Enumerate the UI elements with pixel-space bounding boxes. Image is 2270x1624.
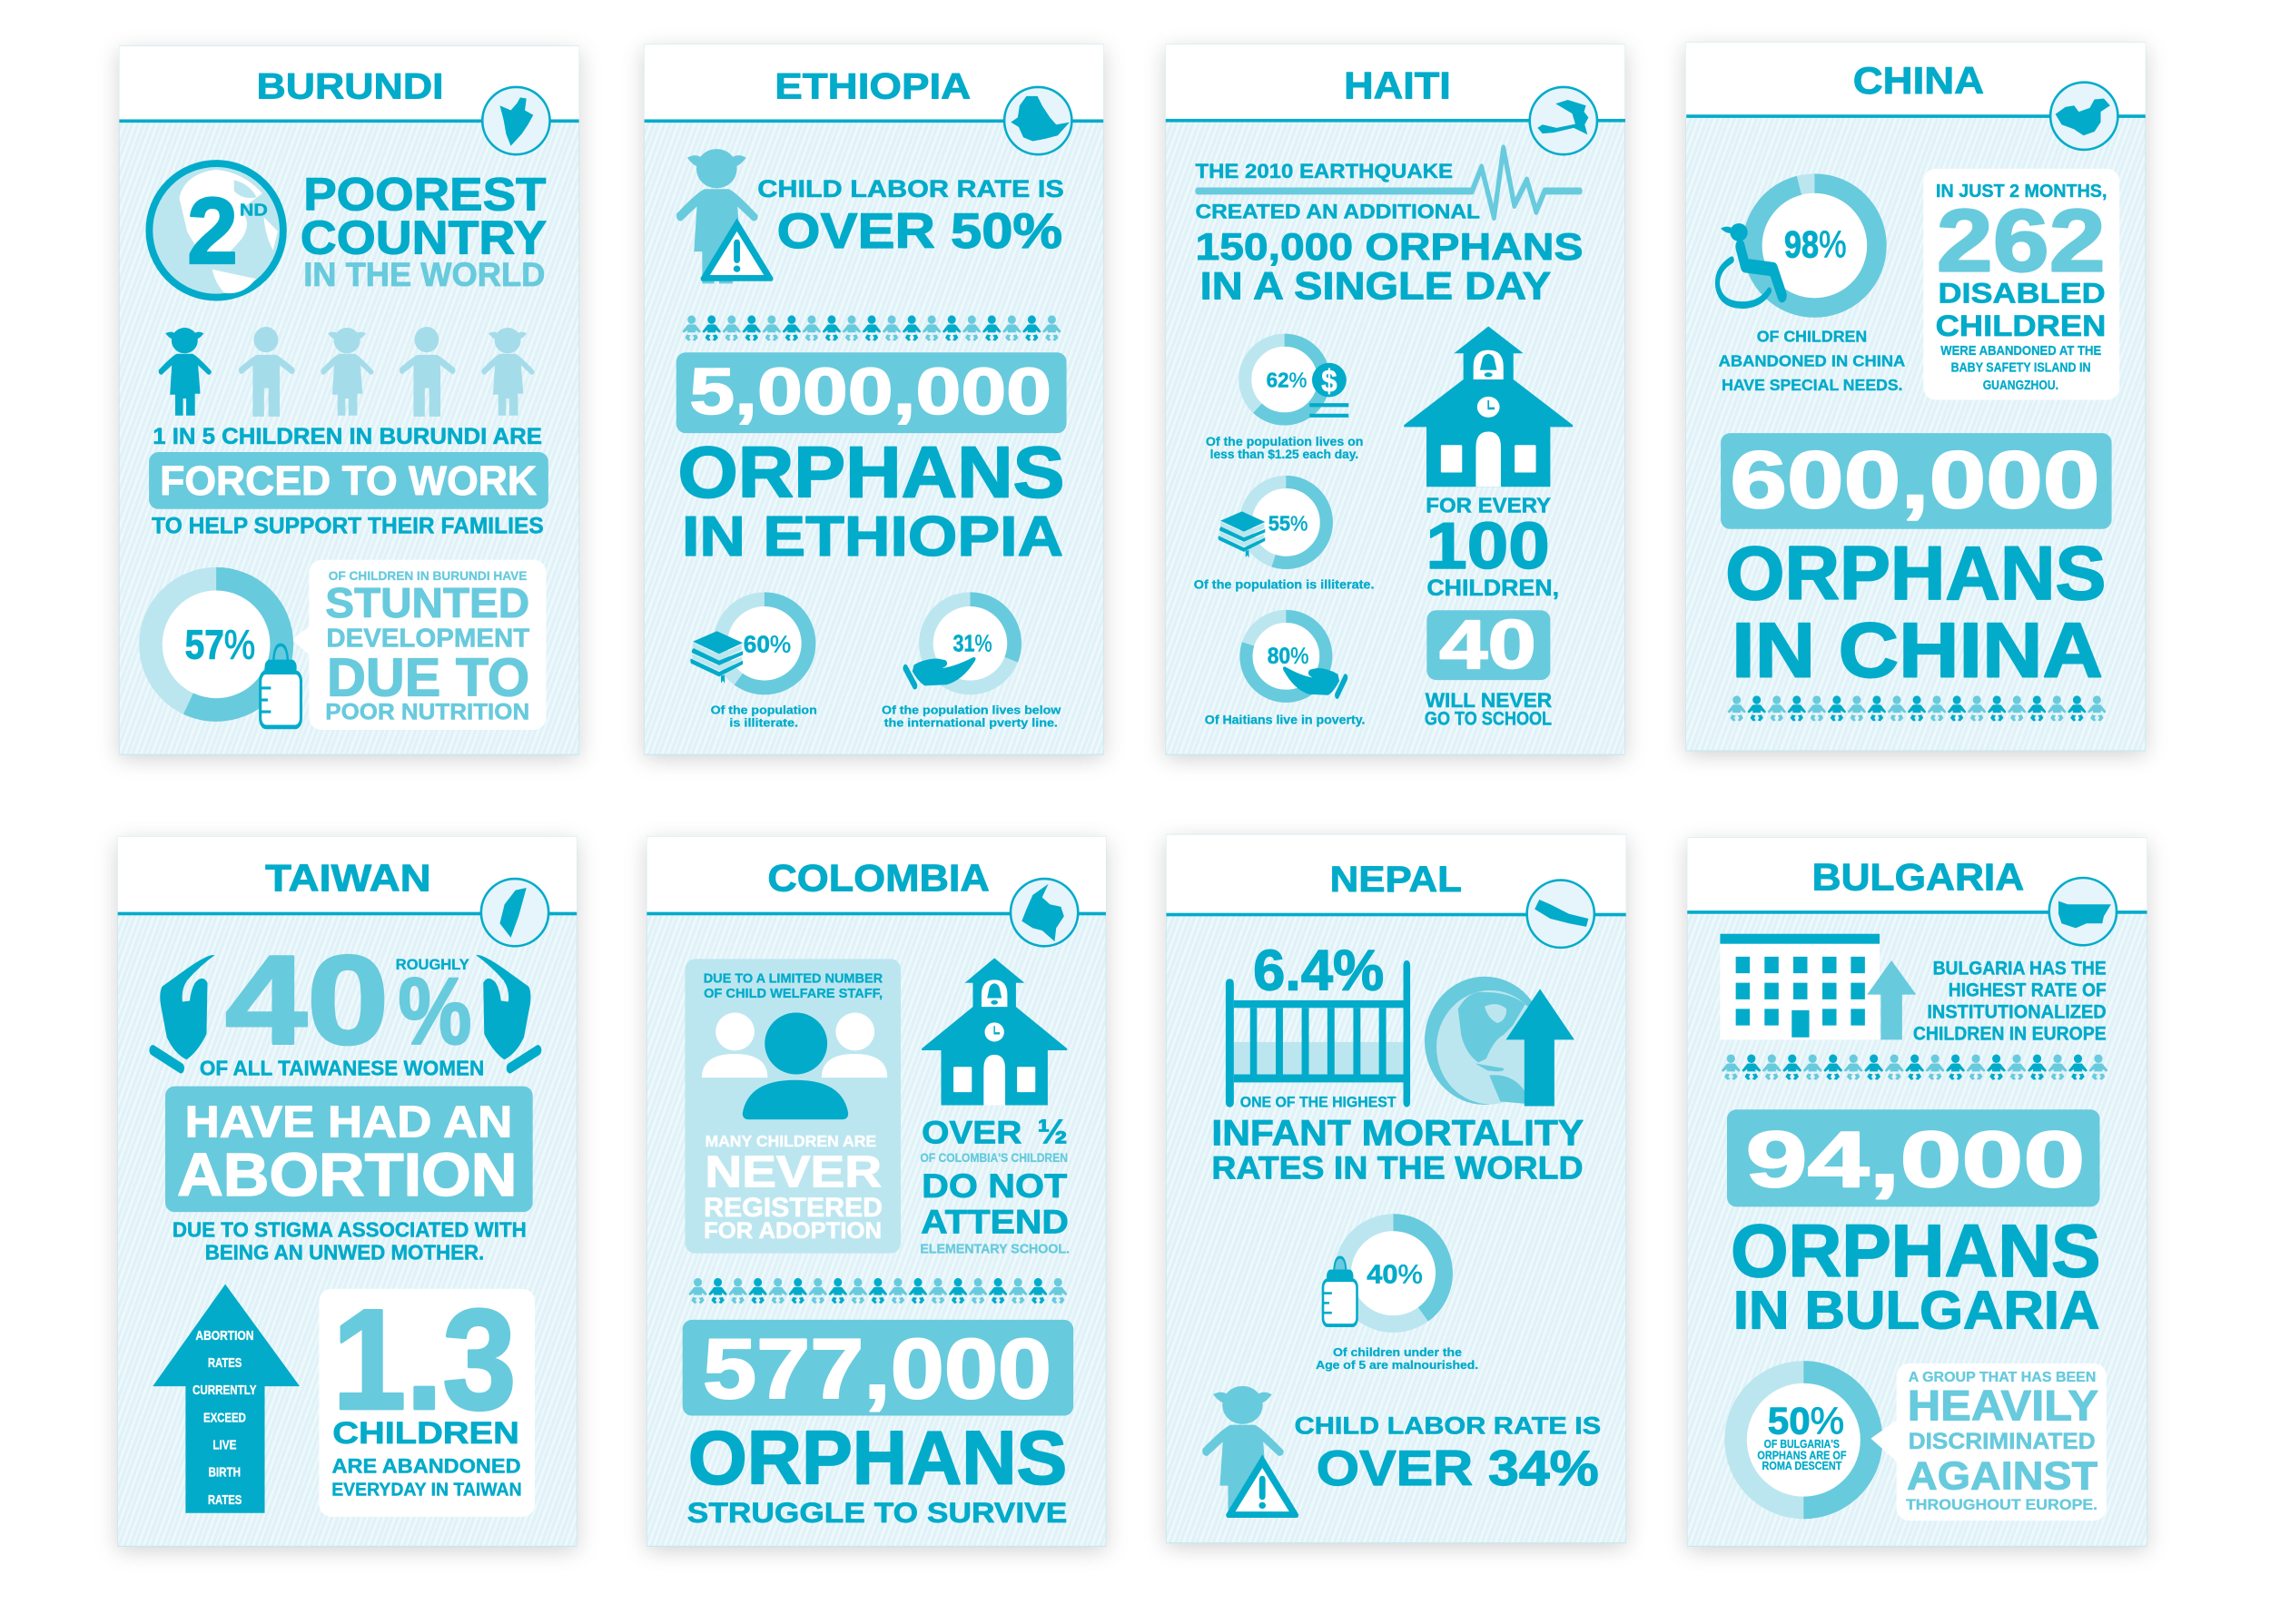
text: for every 100 children (1426, 494, 1559, 601)
callout: stunted development: POOR NUTRITION (325, 699, 529, 724)
panel: Colombia (646, 837, 1106, 1551)
callout: stunted development: DEVELOPMENT (326, 625, 530, 654)
chart: donut 98%: 98% (1784, 223, 1847, 266)
icon: open hand (1283, 666, 1346, 695)
callout: heavily discriminated against: HEAVILY (1908, 1383, 2098, 1430)
text: orphans in China: ORPHANS (1725, 532, 2106, 616)
icon: child in wheelchair (1718, 223, 1782, 305)
icon: books (690, 631, 743, 684)
text: orphans in Bulgaria: ORPHANS (1731, 1208, 2101, 1292)
text: child labor rate over 50%: CHILD LABOR RATE IS (757, 176, 1064, 202)
icon: baby bottle (261, 645, 301, 727)
panel: Burundi (119, 46, 579, 759)
chart: donut 55% (1246, 482, 1327, 563)
heading: Ethiopia: ETHIOPIA (775, 66, 971, 107)
chart: donut 98% (1752, 183, 1877, 308)
text: to help support their families: TO HELP SUPPORT THEIR FAMILIES (152, 513, 544, 538)
chart: donut 62%: 62% (1267, 369, 1307, 392)
icon: row of babies (683, 315, 1061, 341)
chart: donut 80% (1246, 616, 1326, 696)
panel: never registered for adoption: NEVER (705, 1147, 882, 1196)
callout: 5,000,000 (676, 352, 1067, 433)
callout: 600,000: 600,000 (1730, 435, 2100, 525)
panel: never registered for adoption: OF CHILD WELFARE STAFF, (704, 985, 883, 1000)
arrow: abortion rates exceed live birth rates: CURRENTLY (192, 1383, 257, 1398)
callout: 262 disabled children (1923, 169, 2119, 400)
chart: donut 50%: ROMA DESCENT (1762, 1461, 1842, 1473)
callout: 262 disabled children: DISABLED (1938, 277, 2106, 309)
heading: Colombia: COLOMBIA (767, 857, 990, 900)
text: orphans struggle to survive: ORPHANS (688, 1416, 1067, 1501)
text: orphans in Ethiopia: ORPHANS (677, 433, 1065, 513)
text: roughly 40%: % (399, 959, 471, 1064)
text: highest rate of institutionalized children: BULGARIA HAS THE (1933, 958, 2107, 979)
callout: 262 disabled children: WERE ABANDONED AT THE (1940, 342, 2102, 358)
text: highest rate of institutionalized children: HIGHEST RATE OF (1949, 979, 2107, 1000)
text: the 2010 earthquake: THE 2010 EARTHQUAKE (1195, 160, 1453, 182)
text: highest rate of institutionalized children (1913, 958, 2107, 1044)
text: infant mortality rates (1211, 1114, 1584, 1186)
panel: never registered for adoption: DUE TO A LIMITED NUMBER (704, 969, 883, 986)
icon: school house (1404, 326, 1573, 487)
icon: row of babies (1722, 1055, 2107, 1080)
arrow: up (1867, 960, 1916, 1039)
callout: heavily discriminated against: A GROUP THAT HAS BEEN (1909, 1369, 2096, 1384)
text: orphans in Bulgaria (1731, 1208, 2101, 1340)
icon: row of babies (689, 1278, 1067, 1304)
text: roughly 40%: ROUGHLY (396, 957, 469, 974)
chart: donut 60%: 60% (744, 631, 791, 658)
text: 6.4%: 6.4% (1253, 940, 1384, 1003)
text: 150,000 orphans in a single day: IN A SINGLE DAY (1200, 265, 1551, 308)
text: over half do not attend: DO NOT (922, 1167, 1067, 1205)
text: over half do not attend: ½ (1038, 1112, 1068, 1151)
text: illiterate caption: Of the population is illiterate. (1194, 579, 1374, 592)
icon: right hand (476, 955, 538, 1068)
chart: donut 50%: 50% (1768, 1400, 1844, 1442)
chart: donut 31%: 31% (953, 630, 992, 657)
text: illiteracy caption: is illiterate. (729, 717, 798, 730)
icon: seismograph line (1198, 148, 1580, 217)
icon: Taiwan map badge (481, 879, 548, 946)
icon: globe with 2nd rank (149, 163, 283, 298)
arrow: abortion rates exceed live birth rates: RATES (208, 1492, 242, 1507)
text: 150,000 orphans in a single day (1195, 202, 1584, 308)
chart: donut 50%: ORPHANS ARE OF (1757, 1450, 1847, 1462)
callout: 1.3 children abandoned: 1.3 (332, 1281, 516, 1440)
heading: Nepal: NEPAL (1330, 860, 1462, 901)
callout: forced to work: FORCED TO WORK (160, 458, 537, 505)
callout: 40 (1426, 605, 1550, 684)
callout: 1.3 children abandoned: EVERYDAY IN TAIWAN (331, 1480, 522, 1500)
panel: Bulgaria (1687, 838, 2147, 1551)
text: orphans in China (1725, 532, 2106, 694)
text: child labor rate over 50% (757, 176, 1064, 259)
text: for every 100 children: FOR EVERY (1426, 494, 1551, 517)
text: child labor rate over 50%: OVER 50% (777, 203, 1062, 259)
icon: open hand (905, 657, 976, 685)
callout: 1.3 children abandoned (319, 1281, 535, 1517)
text: 150,000 orphans in a single day: 150,000 ORPHANS (1195, 225, 1584, 269)
chart: donut 50% (1736, 1372, 1871, 1508)
text: 150,000 orphans in a single day: CREATED AN ADDITIONAL (1195, 202, 1480, 224)
panel: never registered for adoption (685, 959, 901, 1254)
chart: donut 62% (1245, 340, 1324, 418)
callout: heavily discriminated against: DISCRIMINATED (1909, 1430, 2096, 1454)
text: special needs caption: HAVE SPECIAL NEEDS. (1722, 377, 1903, 395)
chart: donut 31% (926, 599, 1014, 687)
callout: 40: 40 (1439, 605, 1536, 684)
text: poorest country in the world: COUNTRY (301, 212, 547, 264)
text: orphans in Bulgaria: IN BULGARIA (1733, 1280, 2100, 1340)
text: malnourished caption: Age of 5 are malnourished. (1316, 1360, 1478, 1373)
heading: China: CHINA (1853, 59, 1984, 103)
chart: donut 60% (720, 599, 809, 687)
panel: never registered for adoption: MANY CHILDREN ARE (705, 1133, 876, 1151)
text: poverty caption: Of Haitians live in poverty. (1205, 714, 1365, 727)
text: poverty caption: Of the population lives below (882, 704, 1061, 717)
panel: Taiwan (118, 837, 577, 1551)
callout: 94,000 (1727, 1109, 2100, 1206)
icon: girl with warning sign (1202, 1386, 1298, 1518)
chart: donut 80%: 80% (1268, 643, 1309, 669)
text: poverty caption (882, 704, 1061, 730)
text: special needs caption: ABANDONED IN CHINA (1719, 352, 1905, 370)
icon: books (1219, 511, 1265, 557)
arrow: abortion rates exceed live birth rates: RATES (208, 1355, 242, 1371)
text: infant mortality rates: RATES IN THE WORLD (1211, 1151, 1584, 1186)
chart: donut 57% (151, 579, 281, 710)
icon: left hand (153, 955, 214, 1068)
text: $1.25 caption (1206, 437, 1363, 461)
text: infant mortality rates: INFANT MORTALITY (1211, 1114, 1584, 1154)
icon: Ethiopia map badge (1004, 87, 1071, 154)
text: poorest country in the world (301, 169, 547, 293)
text: over half do not attend: ATTEND (921, 1204, 1069, 1241)
text: roughly 40% (200, 929, 484, 1080)
callout: forced to work (149, 452, 548, 509)
text: orphans in Ethiopia (677, 433, 1065, 568)
text: poverty caption: the international pverty line. (884, 717, 1058, 730)
icon: girl with warning sign (676, 149, 774, 283)
icon: institution building (1720, 934, 1880, 1039)
panel: China (1686, 43, 2146, 755)
text: roughly 40%: 40 (225, 929, 389, 1070)
chart: donut 40% (1343, 1223, 1444, 1324)
panel: never registered for adoption: FOR ADOPTION (704, 1217, 882, 1244)
heading: Bulgaria: BULGARIA (1812, 856, 2024, 899)
text: roughly 40%: OF ALL TAIWANESE WOMEN (200, 1057, 484, 1080)
text: child labor rate over 34%: CHILD LABOR RATE IS (1295, 1412, 1601, 1439)
text: $1.25 caption: less than $1.25 each day. (1210, 448, 1358, 461)
text: orphans in Ethiopia: IN ETHIOPIA (682, 507, 1063, 568)
callout: stunted development: DUE TO (327, 646, 529, 707)
callout: stunted development: STUNTED (325, 580, 529, 627)
callout: 262 disabled children: GUANGZHOU. (1983, 377, 2058, 393)
callout: stunted development: OF CHILDREN IN BURUNDI HAVE (329, 571, 528, 584)
callout: have had an abortion: HAVE HAD AN (185, 1097, 512, 1147)
arrow: abortion rates exceed live birth rates: ABORTION (195, 1328, 254, 1343)
icon: globe (1425, 977, 1545, 1105)
arrow: abortion rates exceed live birth rates (153, 1284, 300, 1513)
icon: China map badge (2050, 83, 2117, 150)
panel: Ethiopia (645, 44, 1103, 759)
text: orphans in China: IN CHINA (1732, 607, 2103, 694)
text: malnourished caption: Of children under the (1333, 1347, 1462, 1360)
icon: school house (922, 958, 1067, 1105)
arrow: abortion rates exceed live birth rates: LIVE (212, 1438, 237, 1452)
text: over half do not attend: OVER (922, 1116, 1022, 1151)
icon: baby bottle (1323, 1257, 1357, 1325)
chart: donut 40%: 40% (1367, 1261, 1423, 1290)
arrow: abortion rates exceed live birth rates: EXCEED (203, 1410, 246, 1425)
text: malnourished caption (1316, 1347, 1478, 1373)
callout: 262 disabled children: IN JUST 2 MONTHS, (1936, 182, 2107, 202)
callout: 577,000 (683, 1320, 1073, 1416)
callout: have had an abortion (165, 1087, 533, 1212)
text: stigma note: DUE TO STIGMA ASSOCIATED WITH (173, 1218, 527, 1242)
arrow: up (1505, 989, 1574, 1107)
text: for every 100 children: 100 (1426, 509, 1550, 583)
callout: heavily discriminated against: AGAINST (1907, 1452, 2097, 1498)
heading: Burundi: BURUNDI (257, 66, 443, 107)
text: over half do not attend (920, 1112, 1070, 1256)
text: illiteracy caption (711, 704, 817, 730)
heading: Taiwan: TAIWAN (265, 857, 431, 900)
callout: 94,000: 94,000 (1746, 1115, 2085, 1204)
callout: 262 disabled children: CHILDREN (1936, 309, 2106, 342)
callout: 262 disabled children: BABY SAFETY ISLAND IN (1951, 359, 2091, 375)
text: will never go to school (1425, 690, 1552, 729)
text: orphans struggle to survive (687, 1416, 1067, 1529)
icon: dollar coin: $ (1321, 365, 1337, 399)
callout: 262 disabled children: 262 (1937, 192, 2106, 290)
heading: Haiti: HAITI (1344, 64, 1451, 107)
text: one of the highest: ONE OF THE HIGHEST (1240, 1094, 1397, 1111)
icon: dollar coin (1309, 363, 1348, 416)
icon: Burundi map badge (482, 87, 550, 154)
chart: donut 55%: 55% (1268, 512, 1308, 536)
callout: 5,000,000: 5,000,000 (689, 355, 1051, 428)
text: child labor rate over 34% (1295, 1412, 1601, 1496)
callout: heavily discriminated against (1870, 1363, 2107, 1521)
icon: Haiti map badge (1530, 87, 1597, 154)
text: poorest country in the world: POOREST (303, 169, 546, 221)
icon: globe with 2nd rank: ND (240, 202, 268, 220)
text: will never go to school: GO TO SCHOOL (1425, 708, 1552, 729)
text: orphans struggle to survive: STRUGGLE TO SURVIVE (687, 1497, 1067, 1529)
callout: have had an abortion: ABORTION (177, 1142, 517, 1209)
icon: five children pictogram (159, 327, 534, 417)
chart: donut 50%: OF BULGARIA'S (1764, 1438, 1840, 1452)
icon: crib (1226, 960, 1410, 1107)
icon: row of babies (1728, 695, 2106, 722)
panel: Nepal (1166, 834, 1626, 1548)
text: highest rate of institutionalized children: CHILDREN IN EUROPE (1913, 1022, 2107, 1044)
text: stigma note (173, 1218, 527, 1265)
text: special needs caption (1719, 328, 1905, 395)
callout: stunted development (291, 560, 546, 730)
text: child labor rate over 34%: OVER 34% (1317, 1440, 1599, 1496)
text: over half do not attend: OF COLOMBIA'S CHILDREN (920, 1153, 1068, 1166)
icon: three people (702, 1013, 887, 1119)
panel: never registered for adoption: REGISTERED (704, 1193, 883, 1223)
icon: Nepal map badge (1527, 881, 1594, 948)
callout: 577,000: 577,000 (703, 1321, 1051, 1416)
callout: 600,000 (1721, 433, 2112, 529)
callout: 1.3 children abandoned: ARE ABANDONED (332, 1454, 521, 1477)
text: poorest country in the world: IN THE WORLD (303, 256, 545, 293)
text: stigma note: BEING AN UNWED MOTHER. (205, 1241, 484, 1265)
icon: globe with 2nd rank: 2 (187, 177, 238, 283)
callout: heavily discriminated against: THROUGHOUT EUROPE. (1906, 1497, 2097, 1514)
arrow: abortion rates exceed live birth rates: BIRTH (209, 1464, 241, 1480)
chart: donut 57%: 57% (185, 622, 255, 668)
text: for every 100 children: CHILDREN, (1426, 576, 1559, 601)
text: special needs caption: OF CHILDREN (1757, 328, 1867, 346)
text: highest rate of institutionalized children: INSTITUTIONALIZED (1927, 1000, 2107, 1022)
icon: Bulgaria map badge (2049, 878, 2117, 945)
text: 1 in 5 children: 1 IN 5 CHILDREN IN BURUNDI ARE (153, 424, 542, 449)
text: will never go to school: WILL NEVER (1426, 690, 1552, 713)
panel: Haiti (1166, 44, 1625, 759)
text: over half do not attend: ELEMENTARY SCHOOL. (920, 1240, 1070, 1256)
icon: Colombia map badge (1011, 879, 1078, 946)
callout: 1.3 children abandoned: CHILDREN (332, 1416, 519, 1451)
text: illiteracy caption: Of the population (711, 704, 817, 717)
text: $1.25 caption: Of the population lives on (1206, 437, 1363, 449)
